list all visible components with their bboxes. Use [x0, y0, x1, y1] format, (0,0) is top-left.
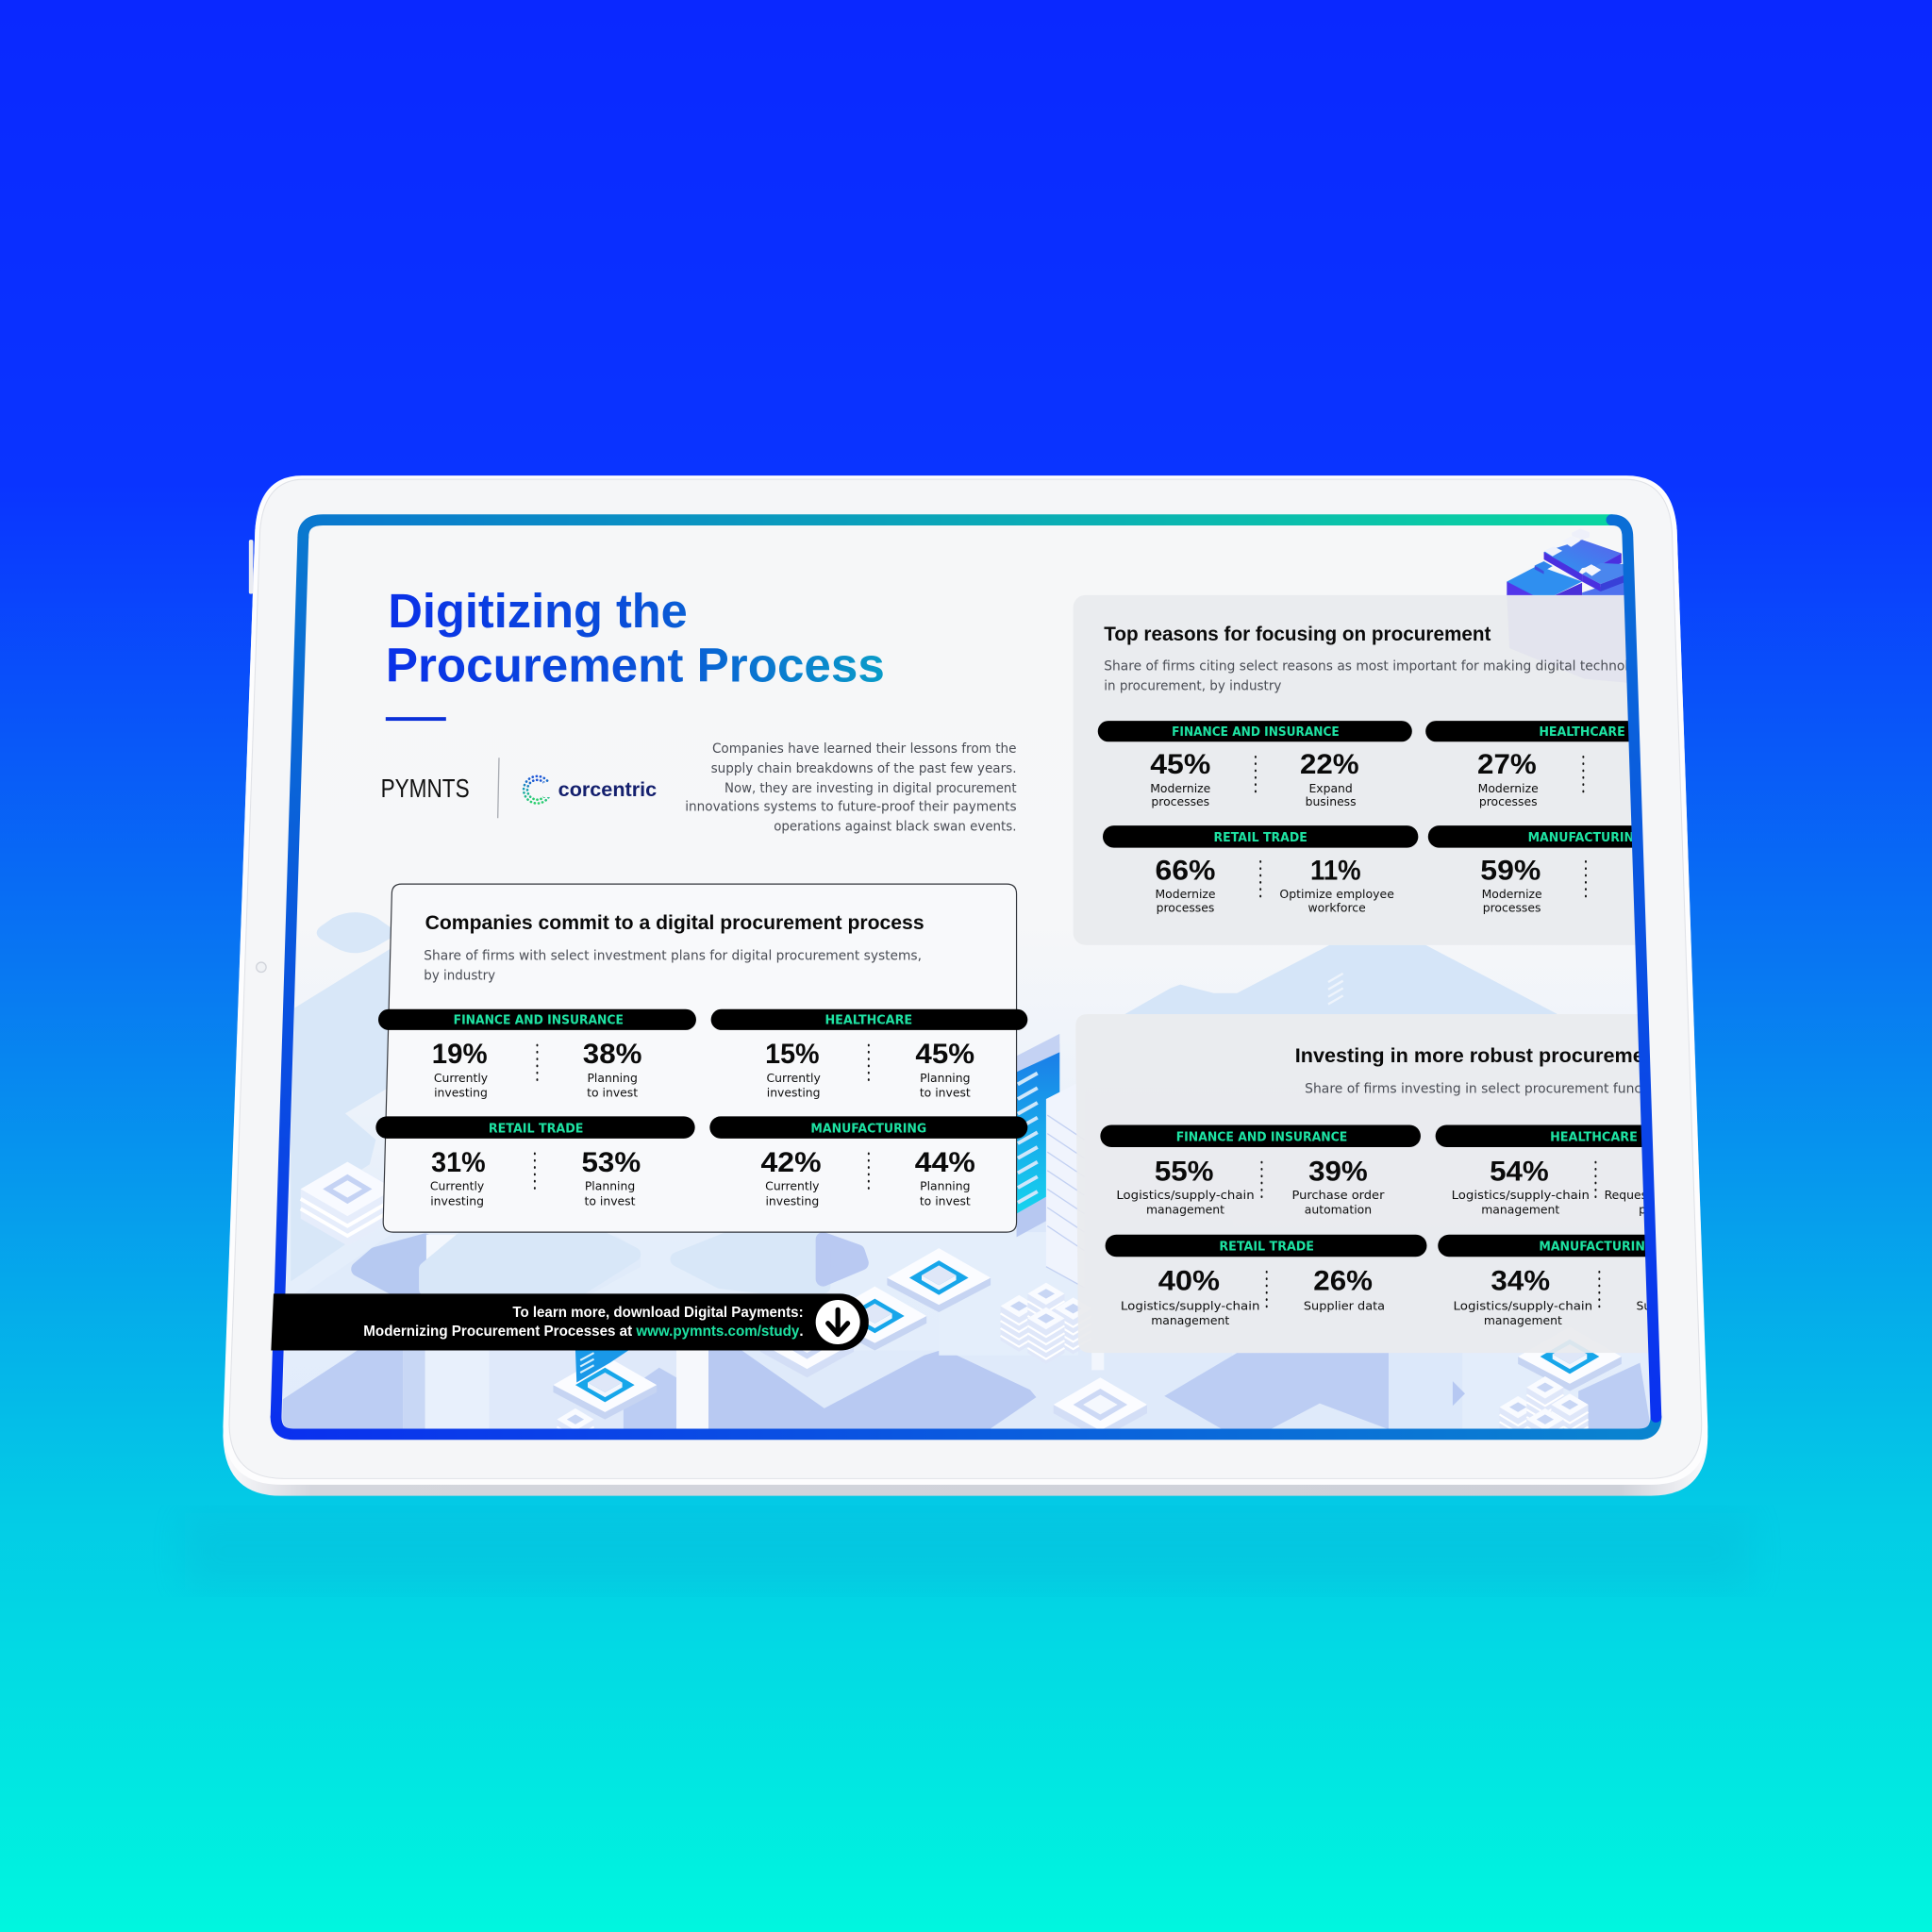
- industry: retail functions: 40%: [1158, 1266, 1220, 1297]
- industry: manufacturing top reasons: processes: [1483, 901, 1541, 915]
- industry: healthcare top reasons: processes: [1479, 794, 1538, 808]
- industry: healthcare investment: 15%: [765, 1039, 820, 1070]
- industry: manufacturing investment: Planning: [920, 1179, 970, 1193]
- industry: finance top reasons: Modernize: [1150, 781, 1210, 795]
- industry: retail investment: 53%: [581, 1147, 641, 1178]
- industry: healthcare investment: investing: [767, 1085, 821, 1099]
- heading: top reasons: Top reasons for focusing on procurement: [1104, 622, 1491, 645]
- industry: healthcare functions: HEALTHCARE: [1550, 1130, 1638, 1144]
- industry: finance top reasons: 22%: [1300, 749, 1359, 780]
- industry: finance investment: [378, 1009, 696, 1099]
- icon: chip with screen: [553, 1351, 657, 1420]
- industry: finance functions: [1100, 1124, 1421, 1217]
- intro paragraph: Now, they are investing in digital procurement: [724, 781, 1017, 796]
- icon: server cube cluster centre: [1000, 1283, 1079, 1360]
- description: digital procurement commitment: [424, 948, 922, 983]
- panel: digital procurement commitment: [375, 884, 1027, 1232]
- industry: finance top reasons: FINANCE AND INSURANCE: [1172, 725, 1340, 740]
- intro paragraph: [685, 741, 1017, 834]
- tablet shadow: [185, 1513, 1750, 1590]
- industry: finance top reasons: business: [1306, 794, 1357, 808]
- industry: manufacturing functions: Logistics/supply-chain: [1454, 1298, 1592, 1312]
- industry: finance functions: 39%: [1308, 1156, 1368, 1187]
- tablet body: [223, 475, 1707, 1496]
- icon: white chip bottom: [1054, 1377, 1147, 1428]
- heading: robust procurement: Investing in more robust procurement functions: [1295, 1043, 1760, 1067]
- icon: server cube small: [557, 1408, 594, 1428]
- icon: chip right under panel: [1518, 1340, 1622, 1391]
- description: digital procurement commitment: by industry: [424, 968, 495, 983]
- industry: retail investment: Currently: [430, 1179, 484, 1193]
- industry: retail top reasons: processes: [1157, 901, 1214, 915]
- intro paragraph: innovations systems to future-proof their payments: [685, 799, 1017, 814]
- industry: retail investment: [375, 1116, 695, 1208]
- industry: manufacturing investment: MANUFACTURING: [810, 1122, 926, 1136]
- title: [386, 584, 885, 691]
- industry: healthcare investment: 45%: [915, 1039, 974, 1070]
- industry: retail investment: Planning: [585, 1179, 635, 1193]
- industry: healthcare functions: Request for: [1605, 1188, 1673, 1202]
- industry: finance investment: FINANCE AND INSURANCE: [454, 1013, 624, 1027]
- screen gradient frame: [276, 520, 1656, 1434]
- icon: server cube cluster right: [1499, 1376, 1589, 1428]
- industry: manufacturing functions: MANUFACTURING: [1539, 1241, 1655, 1255]
- industry: manufacturing top reasons: MANUFACTURING: [1528, 831, 1643, 845]
- industry: retail functions: Supplier data: [1304, 1298, 1385, 1312]
- call to action banner: Modernizing Procurement Processes at www.pymnts.com/study.: [363, 1324, 804, 1340]
- industry: retail investment: 31%: [431, 1147, 486, 1178]
- industry: retail top reasons: workforce: [1308, 901, 1366, 915]
- title rule: [386, 717, 446, 721]
- industry: retail functions: management: [1151, 1313, 1229, 1327]
- industry: finance investment: Currently: [434, 1071, 488, 1085]
- industry: finance functions: Purchase order: [1291, 1188, 1385, 1202]
- industry: retail top reasons: [1103, 825, 1418, 915]
- icon: chip center right: [887, 1248, 991, 1312]
- logo: PYMNTS: PYMNTS: [381, 774, 470, 803]
- heading: digital procurement commitment: Companies commit to a digital procurement process: [425, 910, 924, 934]
- industry: finance investment: investing: [434, 1085, 488, 1099]
- industry: manufacturing top reasons: Modernize: [1482, 887, 1542, 901]
- icon: building striped blue: [1017, 1034, 1059, 1237]
- industry: healthcare functions: 54%: [1490, 1156, 1549, 1187]
- industry: finance investment: to invest: [587, 1085, 638, 1099]
- industry: manufacturing investment: 42%: [761, 1147, 822, 1178]
- industry: healthcare top reasons: Modernize: [1478, 781, 1539, 795]
- industry: manufacturing functions: 34%: [1491, 1266, 1550, 1297]
- industry: healthcare functions: [1436, 1124, 1644, 1216]
- industry: finance functions: FINANCE AND INSURANCE: [1176, 1130, 1347, 1144]
- industry: healthcare top reasons: [1425, 721, 1628, 808]
- industry: healthcare functions: proposal: [1639, 1203, 1689, 1217]
- industry: finance functions: 55%: [1155, 1156, 1214, 1187]
- icon: white tower building: [1045, 1092, 1077, 1285]
- industry: retail top reasons: Optimize employee: [1279, 887, 1394, 901]
- intro paragraph: Companies have learned their lessons from the: [712, 741, 1017, 757]
- icon: blue cube cluster top right: [1507, 540, 1624, 595]
- industry: manufacturing investment: investing: [765, 1193, 819, 1208]
- icon: chip left stack: [300, 1162, 383, 1244]
- industry: retail investment: RETAIL TRADE: [489, 1122, 583, 1136]
- industry: retail top reasons: RETAIL TRADE: [1214, 831, 1307, 845]
- industry: manufacturing functions: Supplier data: [1637, 1298, 1714, 1312]
- industry: manufacturing investment: Currently: [765, 1179, 819, 1193]
- industry: manufacturing investment: [709, 1116, 1027, 1208]
- industry: retail functions: Logistics/supply-chain: [1121, 1298, 1260, 1312]
- icon: download arrow: [816, 1300, 860, 1344]
- icon: chip center: [855, 1287, 926, 1351]
- industry: retail functions: 26%: [1313, 1266, 1373, 1297]
- industry: manufacturing top reasons: 59%: [1480, 856, 1541, 887]
- industry: finance top reasons: [1098, 721, 1412, 808]
- industry: retail top reasons: Modernize: [1155, 887, 1216, 901]
- industry: manufacturing investment: 44%: [915, 1147, 975, 1178]
- logo: corcentric: corcentric: [558, 777, 657, 801]
- industry: finance functions: automation: [1305, 1203, 1372, 1217]
- description: top reasons: Share of firms citing select reasons as most important for making digital technolo: [1104, 659, 1637, 675]
- industry: finance investment: 19%: [432, 1039, 488, 1070]
- industry: manufacturing investment: to invest: [920, 1193, 971, 1208]
- logo: corcentric: [524, 776, 657, 804]
- industry: manufacturing top reasons: [1428, 825, 1632, 914]
- industry: healthcare investment: HEALTHCARE: [824, 1013, 912, 1027]
- icon: chip under banner: [760, 1347, 854, 1377]
- call to action banner: [271, 1293, 869, 1351]
- industry: retail functions: RETAIL TRADE: [1219, 1241, 1314, 1255]
- industry: finance top reasons: Expand: [1308, 781, 1353, 795]
- industry: retail investment: investing: [430, 1193, 484, 1208]
- industry: healthcare investment: Planning: [920, 1071, 970, 1085]
- description: robust procurement: Share of firms investing in select procurement functions, by industry: [1305, 1082, 1756, 1097]
- intro paragraph: operations against black swan events.: [774, 819, 1017, 834]
- industry: healthcare top reasons: HEALTHCARE: [1539, 725, 1625, 740]
- industry: healthcare top reasons: 27%: [1477, 749, 1537, 780]
- industry: healthcare functions: Logistics/supply-chain: [1452, 1188, 1590, 1202]
- industry: manufacturing functions: management: [1484, 1313, 1562, 1327]
- description: top reasons: [1104, 659, 1637, 693]
- industry: retail top reasons: 66%: [1155, 856, 1215, 887]
- industry: healthcare functions: management: [1481, 1203, 1559, 1217]
- industry: retail top reasons: 11%: [1310, 856, 1361, 887]
- description: digital procurement commitment: Share of firms with select investment plans for digital procurement systems,: [424, 948, 922, 963]
- description: top reasons: in procurement, by industry: [1104, 678, 1281, 693]
- industry: finance top reasons: processes: [1151, 794, 1209, 808]
- industry: finance functions: management: [1146, 1203, 1224, 1217]
- industry: healthcare investment: Currently: [766, 1071, 821, 1085]
- panel: top reasons: [1074, 594, 1636, 945]
- call to action banner: To learn more, download Digital Payments:: [512, 1305, 804, 1321]
- industry: manufacturing functions: [1438, 1234, 1647, 1326]
- industry: finance investment: 38%: [583, 1039, 641, 1070]
- intro paragraph: supply chain breakdowns of the past few years.: [711, 761, 1017, 776]
- industry: finance investment: Planning: [587, 1071, 638, 1085]
- industry: healthcare investment: to invest: [920, 1085, 971, 1099]
- logo divider: [498, 758, 499, 818]
- title: Procurement Process: [386, 638, 885, 691]
- title: Digitizing the: [388, 584, 688, 638]
- screen: [282, 540, 1651, 1428]
- panel: robust procurement: [1075, 1014, 1648, 1353]
- industry: retail functions: [1106, 1235, 1426, 1327]
- illustrated isometric background: [282, 912, 1651, 1429]
- industry: retail investment: to invest: [585, 1193, 636, 1208]
- industry: finance top reasons: 45%: [1150, 749, 1210, 780]
- industry: finance functions: Logistics/supply-chain: [1116, 1188, 1255, 1202]
- industry: healthcare investment: [711, 1009, 1027, 1099]
